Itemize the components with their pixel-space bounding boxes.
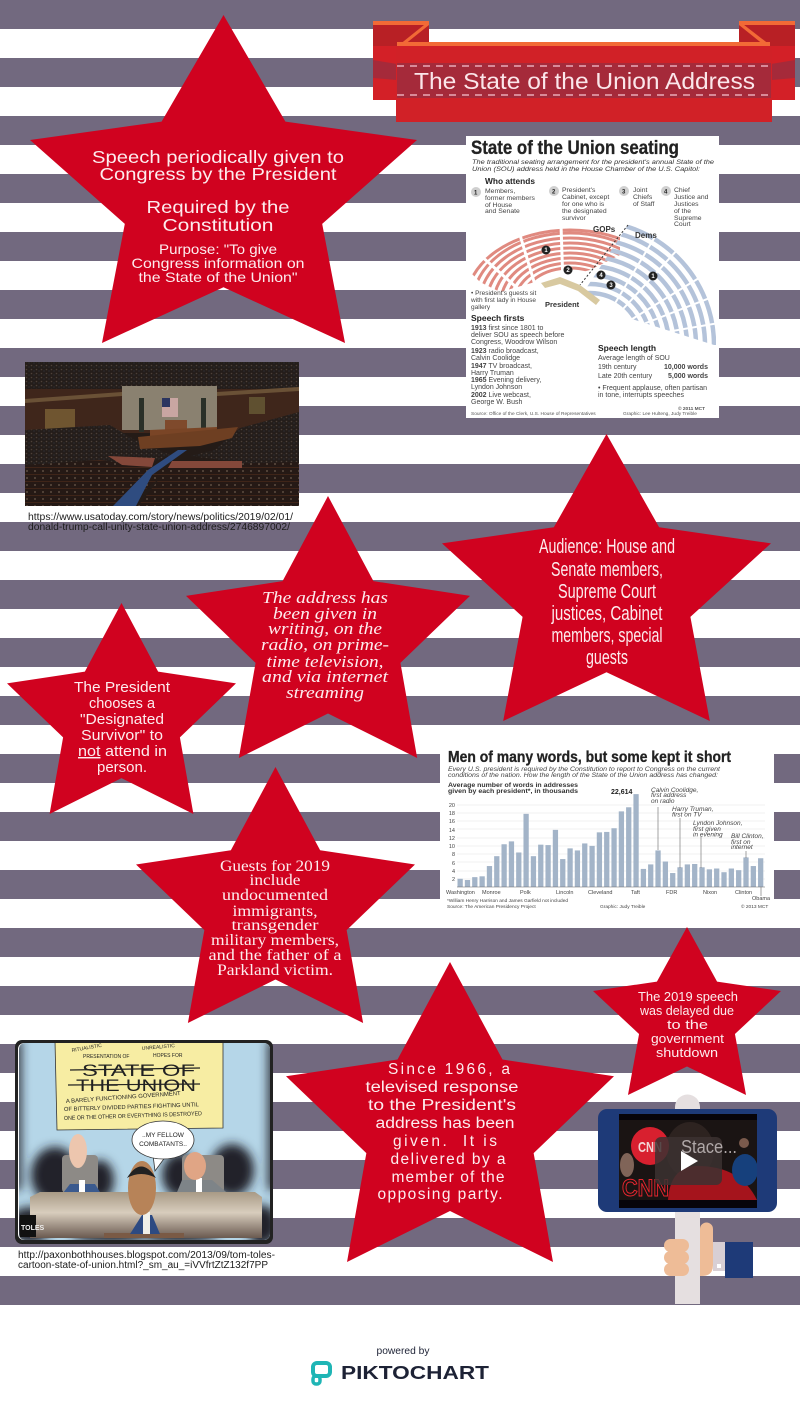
bar chart: words in addresses: Nixon (703, 890, 717, 896)
bar chart: words in addresses: first on TV (672, 812, 702, 818)
star: formats of the address: time television, (266, 652, 384, 671)
star: 2019 speech delay (593, 927, 781, 1095)
seating chart graphic: The traditional seating arrangement for the president's annual State of the (472, 159, 714, 166)
bar chart: words in addresses: 12 (449, 836, 455, 842)
speech bubble: ..MY FELLOW (142, 1132, 185, 1139)
seating chart graphic: the designated (562, 208, 607, 215)
star: 2019 speech delay: was delayed due (639, 1004, 734, 1018)
seating chart graphic: Justices (674, 201, 699, 208)
seating chart graphic: for one who is (562, 201, 605, 208)
star: 2019 speech delay: to the (667, 1018, 708, 1032)
blue seats (588, 225, 716, 345)
seating chart graphic: Cabinet, except (562, 194, 609, 201)
star: formats of the address: radio, on prime- (261, 635, 389, 654)
seating chart graphic: Union (SOU) address held in the House Chamber of the U.S. Capitol: (472, 166, 700, 173)
footer: powered by Piktochart: powered by (376, 1346, 430, 1357)
icon: hand holding phone with video (598, 1094, 777, 1304)
seating chart graphic: and Senate (485, 208, 520, 215)
hand (664, 1223, 753, 1278)
seating chart graphic: gallery (471, 304, 491, 311)
seating chart graphic: Supreme (674, 215, 702, 222)
bar chart: words in addresses: 20 (449, 803, 455, 809)
bar chart: words in addresses: on radio (651, 798, 675, 805)
seating chart graphic: 1 (474, 190, 478, 196)
seating chart graphic: • President's guests sit (471, 290, 536, 297)
photo source link (28, 512, 293, 533)
seating chart graphic: © 2011 MCT (678, 405, 705, 412)
bar chart: words in addresses: Clinton (735, 890, 752, 896)
star: 2019 guests: immigrants, (232, 903, 318, 920)
star: televised response: delivered by a (390, 1151, 506, 1168)
bar chart: words in addresses: 8 (452, 852, 455, 858)
star: designated survivor (7, 603, 236, 814)
bar chart: words in addresses: first given (693, 826, 721, 833)
star: formats of the address: been given in (273, 604, 377, 623)
star: audience: Senate members, (551, 559, 663, 581)
bar chart: words in addresses: Obama (752, 896, 771, 902)
star: designated survivor: Survivor" to (81, 728, 163, 744)
bar chart: words in addresses (440, 748, 774, 910)
bar chart: words in addresses: Lincoln (556, 890, 573, 896)
photo: House chamber (25, 362, 299, 506)
bar chart: words in addresses: Average number of words in addresses (448, 782, 578, 789)
star: 2019 guests: undocumented (222, 887, 328, 904)
chairs (62, 1155, 224, 1193)
bar chart: words in addresses: Calvin Coolidge, (651, 787, 699, 794)
seating chart graphic: George W. Bush (471, 399, 522, 406)
star: 2019 speech delay: government (651, 1032, 725, 1046)
bar chart: words in addresses: *William Henry Harrison and James Garfield not included (447, 898, 568, 904)
star: formats of the address (186, 496, 470, 758)
star: audience (442, 434, 771, 721)
sign: PRESENTATION OF (83, 1054, 129, 1060)
bar chart: words in addresses: Bill Clinton, (731, 833, 764, 840)
signature: TOLES (21, 1225, 45, 1232)
star: 2019 guests: transgender (232, 917, 319, 934)
star: designated survivor: not attend in (78, 744, 167, 760)
seating chart graphic: 1965 Evening delivery, (471, 377, 541, 384)
seating chart graphic: GOPs (593, 225, 616, 234)
seating chart graphic: Harry Truman (471, 370, 514, 377)
signature (20, 1215, 45, 1237)
sign: HOPES FOR (153, 1053, 183, 1059)
star: 2019 speech delay: The 2019 speech (638, 990, 738, 1004)
seating chart graphic: 10,000 words (664, 364, 708, 371)
seating chart graphic: Who attends (485, 176, 535, 186)
star: speech definition: Required by the (146, 197, 290, 217)
star: 2019 guests: Guests for 2019 (220, 858, 330, 875)
bar chart: words in addresses: Source: The American Presidency Project (447, 904, 536, 910)
star: speech definition: Congress information on (132, 255, 304, 271)
seating chart graphic: Congress, Woodrow Wilson (471, 339, 557, 346)
bar chart: words in addresses: Taft (631, 890, 640, 896)
sign: RITUALISTIC (71, 1043, 103, 1054)
star: 2019 speech delay: shutdown (656, 1046, 718, 1060)
video thumbnail: Stace... (681, 1137, 737, 1157)
seating chart graphic: Chiefs (633, 194, 653, 201)
seating chart graphic: President (545, 300, 580, 309)
bar chart: words in addresses: Polk (520, 890, 531, 896)
seating chart graphic: with first lady in House (470, 297, 536, 304)
sign: THE UNION (76, 1076, 196, 1095)
star: designated survivor: person. (97, 760, 147, 776)
flag (162, 398, 178, 417)
bar chart: words in addresses: first on (731, 839, 751, 846)
seating chart graphic: President's (562, 187, 596, 194)
bar chart: words in addresses: 2 (452, 877, 455, 883)
video thumbnail: CNN (622, 1175, 669, 1202)
bar chart: words in addresses: Monroe (482, 890, 501, 896)
left figure (64, 1134, 100, 1192)
star: formats of the address: writing, on the (268, 619, 383, 638)
seating chart graphic: State of the Union seating (471, 138, 679, 159)
seating chart graphic: 19th century (598, 364, 637, 371)
bar chart: words in addresses: Every U.S. president is required by the Constitution to report to Congress on the current (448, 766, 721, 773)
cartoon source link: http://paxonbothhouses.blogspot.com/2013/09/tom-toles- (18, 1250, 275, 1261)
sign: ONE OR THE OTHER OR EVERYTHING IS DESTROYED (64, 1111, 202, 1122)
star: televised response: to the President's (368, 1097, 516, 1114)
bar chart: words in addresses: 22,614 (611, 789, 633, 796)
seating chart graphic: 5,000 words (668, 373, 708, 380)
seating chart graphic: in tone, interrupts speeches (598, 392, 684, 399)
star: audience: guests (586, 647, 628, 669)
star: designated survivor: "Designated (80, 712, 164, 728)
seating chart graphic: survivor (562, 215, 587, 222)
bar chart: words in addresses: 10 (449, 844, 455, 850)
star: audience: Audience: House and (539, 536, 675, 558)
speech bubble: COMBATANTS.. (139, 1141, 187, 1148)
seating chart graphic: 2 (552, 190, 556, 196)
star: 2019 guests: include (250, 872, 301, 889)
star: formats of the address: and via internet (262, 667, 389, 686)
seating chart graphic: of House (485, 202, 512, 209)
photo source link: donald-trump-call-unity-state-union-address/2746897002/ (28, 522, 290, 533)
footer: powered by Piktochart: PIKTOCHART (341, 1362, 490, 1383)
photo source link: https://www.usatoday.com/story/news/politics/2019/02/01/ (28, 512, 293, 523)
bar chart: words in addresses: first address (651, 792, 687, 799)
sign: OF BITTERLY DIVIDED PARTIES FIGHTING UNTIL (64, 1102, 200, 1113)
bar chart: words in addresses: given by each president*, in thousands (448, 788, 578, 795)
seating chart graphic: 3 (609, 283, 613, 289)
sign: STATE OF (82, 1061, 195, 1080)
bar chart: words in addresses: Graphic: Judy Treible (600, 904, 646, 910)
star: speech definition: Speech periodically given to (92, 147, 344, 167)
seating chart graphic: 1947 TV broadcast, (471, 363, 532, 370)
cartoon source link (18, 1250, 275, 1271)
star: speech definition: Purpose: "To give (159, 241, 277, 257)
star: designated survivor: chooses a (89, 696, 156, 712)
star: designated survivor: The President (74, 680, 170, 696)
seating chart graphic: 1923 radio broadcast, (471, 348, 539, 355)
star: speech definition (30, 15, 417, 343)
star: 2019 guests (136, 767, 415, 1023)
seating chart graphic: former members (485, 195, 535, 202)
star: 2019 guests: Parkland victim. (217, 962, 333, 979)
speech bubble (132, 1121, 194, 1171)
seating chart graphic: Chief (674, 187, 690, 194)
sign: UNREALISTIC (142, 1043, 175, 1052)
seating chart graphic: 1 (544, 248, 548, 254)
seating chart graphic: Speech length (598, 343, 656, 353)
bar chart: words in addresses: Cleveland (588, 890, 612, 896)
seating chart graphic: Court (674, 221, 691, 228)
bar chart: words in addresses: 6 (452, 861, 455, 867)
seating chart graphic: 2 (566, 268, 570, 274)
seating chart graphic (466, 136, 719, 418)
icon: Piktochart logo (313, 1363, 330, 1384)
bars (458, 794, 763, 887)
seating chart graphic: Joint (633, 187, 647, 194)
title: The State of the Union Address (414, 68, 755, 94)
sign: A BARELY FUNCTIONING GOVERNMENT (66, 1091, 181, 1105)
star: audience: justices, Cabinet (551, 603, 663, 625)
seating chart graphic: of Staff (633, 201, 655, 208)
bar chart: words in addresses: FDR (666, 890, 677, 896)
star: formats of the address: streaming (286, 683, 364, 702)
bar chart: words in addresses: 18 (449, 811, 455, 817)
seating chart graphic: 3 (622, 190, 626, 196)
seating chart graphic: deliver SOU as speech before (471, 332, 564, 339)
bar chart: words in addresses: 16 (449, 819, 455, 825)
star: televised response: member of the (392, 1169, 504, 1186)
seating chart graphic: Lyndon Johnson (471, 384, 522, 391)
bar chart: words in addresses: 14 (449, 828, 455, 834)
footer: powered by Piktochart (313, 1346, 490, 1384)
star: televised response: address has been (376, 1115, 514, 1132)
seating chart graphic: Late 20th century (598, 373, 653, 380)
seating chart graphic: 1913 first since 1801 to (471, 325, 543, 332)
bar chart: words in addresses: Men of many words, but some kept it short (448, 749, 732, 766)
bar chart: words in addresses: Harry Truman, (672, 806, 714, 813)
star: audience: Supreme Court (558, 581, 656, 603)
bar chart: words in addresses: Washington (446, 890, 475, 896)
title banner (373, 21, 795, 122)
star: televised response (286, 962, 614, 1262)
seating chart graphic: Members, (485, 188, 515, 195)
star: audience: members, special (552, 625, 662, 647)
video thumbnail: CNN (638, 1139, 662, 1156)
seating chart graphic: Speech firsts (471, 313, 525, 323)
seating chart graphic: 4 (664, 190, 668, 196)
star: 2019 guests: and the father of a (208, 947, 342, 964)
center figure (127, 1161, 160, 1234)
seating chart graphic: Average length of SOU (598, 355, 670, 362)
star: speech definition: the State of the Union" (138, 269, 298, 285)
seating chart graphic: of the (674, 208, 691, 215)
bar chart: words in addresses: in evening (693, 832, 723, 838)
seating chart graphic: • Frequent applause, often partisan (598, 385, 707, 392)
seating chart graphic: 1 (651, 274, 655, 280)
star: televised response: given. It is (393, 1133, 497, 1150)
star: televised response: televised response (366, 1079, 518, 1096)
seating chart graphic: Dems (635, 231, 657, 240)
star: 2019 guests: military members, (211, 932, 339, 949)
desk (30, 1192, 262, 1238)
bar chart: words in addresses: internet (731, 844, 754, 851)
sign (55, 1041, 223, 1130)
star: televised response: opposing party. (378, 1186, 502, 1203)
cartoon source link: cartoon-state-of-union.html?_sm_au_=iVVfrtZtZ132f7PP (18, 1260, 268, 1271)
bar chart: words in addresses: conditions of the nation. How the length of the State of the Union address has changed: (448, 772, 718, 779)
red seats (472, 228, 620, 292)
editorial cartoon (8, 1040, 278, 1245)
star: televised response: Since 1966, a (388, 1061, 510, 1078)
star: speech definition: Congress by the President (100, 164, 337, 184)
seating chart graphic: 2002 Live webcast, (471, 392, 531, 399)
seating chart graphic: 4 (599, 273, 603, 279)
seating chart graphic: Calvin Coolidge (471, 355, 520, 362)
seating chart graphic: Source: Office of the Clerk, U.S. House of Representatives (471, 411, 596, 417)
seating chart graphic: Justice and (674, 194, 709, 201)
seating chart graphic: Graphic: Lee Hulteng, Judy Treible (623, 411, 697, 417)
bar chart: words in addresses: © 2013 MCT (741, 903, 768, 910)
star: speech definition: Constitution (162, 215, 274, 235)
star: formats of the address: The address has (262, 588, 388, 607)
right figure (177, 1152, 226, 1192)
video thumbnail (619, 1114, 758, 1208)
bar chart: words in addresses: 4 (452, 869, 455, 875)
bar chart: words in addresses: Lyndon Johnson, (693, 820, 743, 827)
